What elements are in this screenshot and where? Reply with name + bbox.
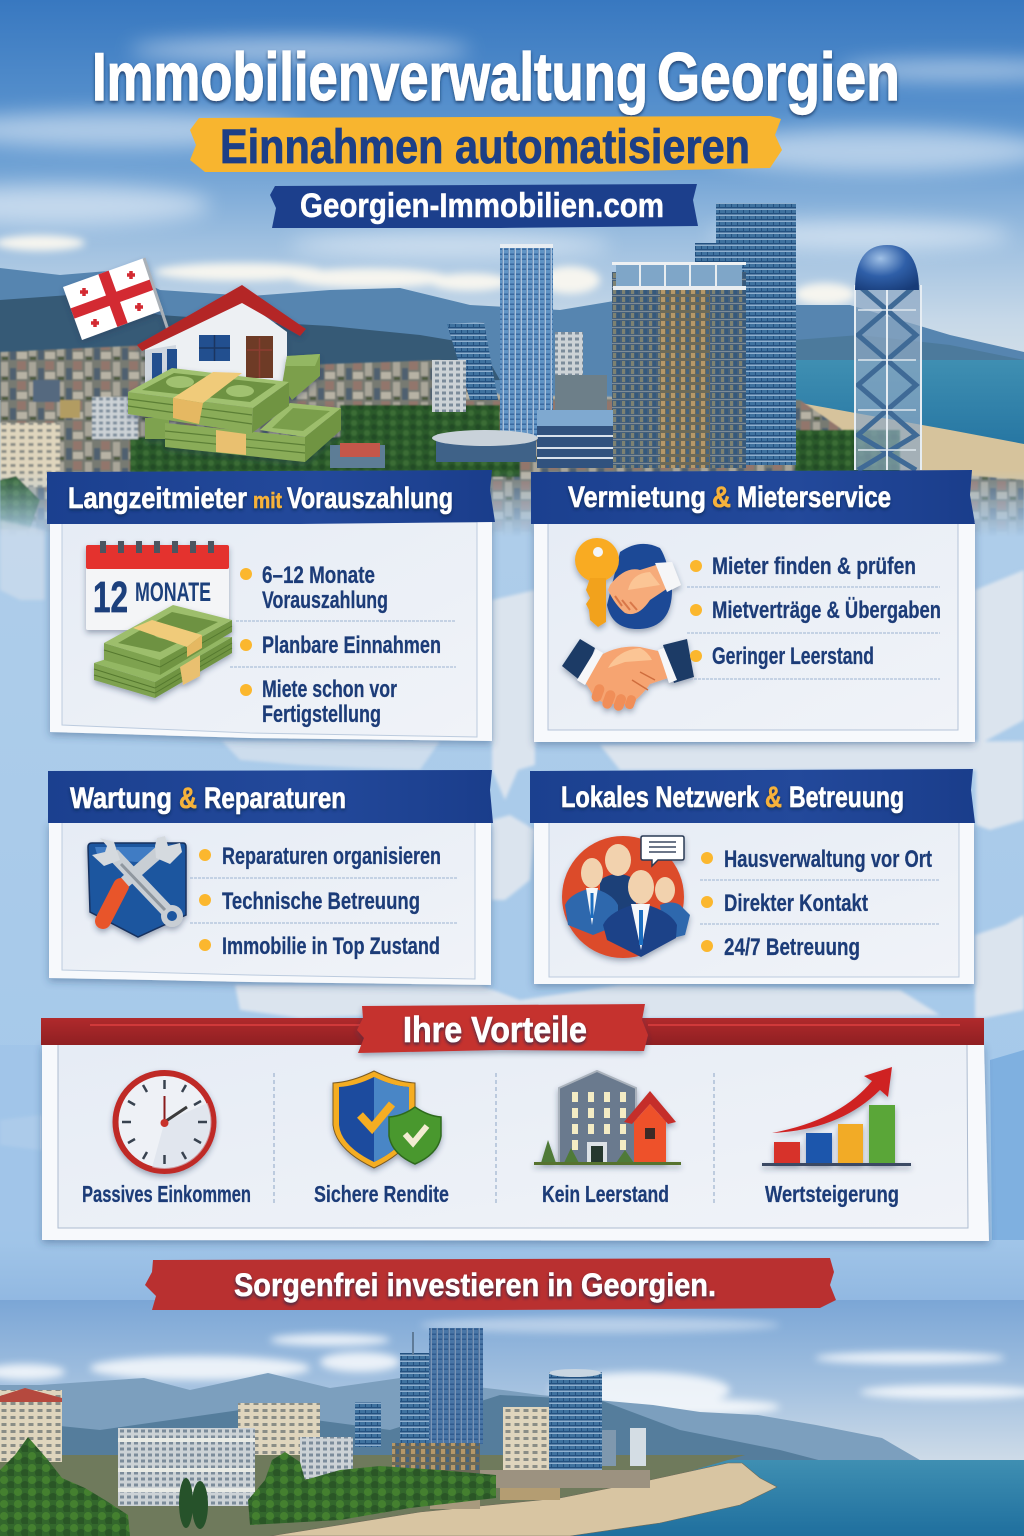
background: Batumi towers: [432, 203, 796, 468]
panel: Wartung: [48, 770, 493, 985]
list: Vorauszahlung: [262, 587, 388, 614]
background: lower city ground: [0, 1455, 745, 1536]
labels: Kein Leerstand: [542, 1181, 669, 1207]
background: sea lower: [480, 1460, 1024, 1536]
heading bar: [530, 769, 975, 823]
list: 24/7 Betreuung: [724, 934, 860, 961]
labels: [82, 1181, 899, 1207]
list: Miete schon vor: [262, 676, 397, 703]
icon: clock: [116, 1073, 214, 1175]
list: [230, 562, 456, 728]
list: [687, 553, 941, 679]
list: Immobilie in Top Zustand: [222, 933, 440, 960]
panel: Vermietung: [531, 470, 975, 742]
icon: calendar 12 Monate: [86, 541, 229, 630]
list: Reparaturen organisieren: [222, 843, 441, 870]
icon: large handshake: [562, 639, 694, 712]
list: [700, 846, 940, 961]
closing banner: [145, 1258, 836, 1310]
background: sea and beach: [790, 360, 1024, 500]
labels: Passives Einkommen: [82, 1181, 251, 1207]
icon: team with speech bubble: [562, 836, 690, 958]
heading bar: Langzeitmieter: [68, 482, 247, 515]
heading band: [41, 1004, 984, 1053]
panel: Ihre Vorteile: [41, 1004, 989, 1241]
heading bar: Reparaturen: [204, 782, 346, 815]
icon: Georgian flag: [63, 258, 168, 340]
list: Mietverträge & Übergaben: [712, 597, 941, 624]
heading bar: Wartung: [70, 782, 172, 815]
list: Hausverwaltung vor Ort: [724, 846, 932, 873]
list: Geringer Leerstand: [712, 643, 874, 670]
background: city panorama: [0, 345, 1024, 560]
list: Fertigstellung: [262, 701, 381, 728]
heading bar: &: [179, 782, 197, 815]
background: lower sky: [0, 1300, 1024, 1480]
icon: shield with tools: [88, 836, 186, 937]
heading bar: [48, 770, 493, 823]
labels: Sichere Rendite: [314, 1181, 449, 1207]
illustration: house with flag and money: [63, 258, 341, 462]
icon: building and house: [534, 1071, 681, 1165]
icon: house: [137, 285, 306, 405]
card body: [50, 522, 492, 741]
panel: Langzeitmieter: [47, 470, 495, 741]
background: sky with clouds: [0, 0, 1024, 400]
card body: [42, 1044, 989, 1241]
heading bar: Lokales Netzwerk: [561, 781, 759, 814]
heading bar: Betreuung: [789, 781, 904, 814]
icon: key and small handshake: [575, 538, 681, 629]
icon: calendar 12 Monate: 12: [93, 573, 128, 622]
card body: [49, 822, 491, 985]
card body: [534, 522, 975, 742]
heading bar: Vorauszahlung: [287, 482, 453, 515]
icon: calendar 12 Monate: MONATE: [135, 577, 211, 607]
list: Planbare Einnahmen: [262, 632, 441, 659]
list: Technische Betreuung: [222, 888, 420, 915]
icon: money stacks: [128, 354, 341, 462]
list: [190, 843, 457, 960]
list: 6–12 Monate: [262, 562, 375, 589]
heading bar: mit: [253, 488, 283, 513]
title: Georgien: [657, 39, 900, 115]
background: lower mountains: [0, 1373, 925, 1463]
background: alphabet tower: [855, 245, 921, 470]
heading bar: &: [712, 481, 731, 514]
panel: Lokales Netzwerk: [530, 769, 975, 984]
background: lower beach: [270, 1463, 777, 1536]
heading band: Ihre Vorteile: [403, 1009, 587, 1050]
heading bar: Mieterservice: [737, 481, 891, 514]
background: lower trees: [0, 1437, 496, 1536]
closing banner: Sorgenfrei investieren in Georgien.: [234, 1267, 716, 1303]
list: Direkter Kontakt: [724, 890, 868, 917]
title: Immobilienverwaltung: [92, 39, 648, 115]
background: mountains: [0, 268, 1024, 400]
subtitle banner: Einnahmen automatisieren: [220, 121, 750, 174]
website banner: Georgien-Immobilien.com: [300, 187, 664, 225]
dividers: [274, 1073, 714, 1205]
icon: shields: [333, 1071, 441, 1168]
background: map section: [0, 470, 1024, 1310]
heading bar: &: [765, 781, 782, 814]
background: lower skyline: [0, 1328, 650, 1509]
icon: growth chart: [762, 1067, 911, 1166]
card body: [534, 822, 974, 984]
heading bar: [531, 470, 975, 524]
icon: money: [94, 605, 232, 698]
heading bar: [47, 470, 495, 524]
heading bar: Vermietung: [568, 481, 706, 514]
labels: Wertsteigerung: [765, 1181, 899, 1207]
list: Mieter finden & prüfen: [712, 553, 916, 580]
